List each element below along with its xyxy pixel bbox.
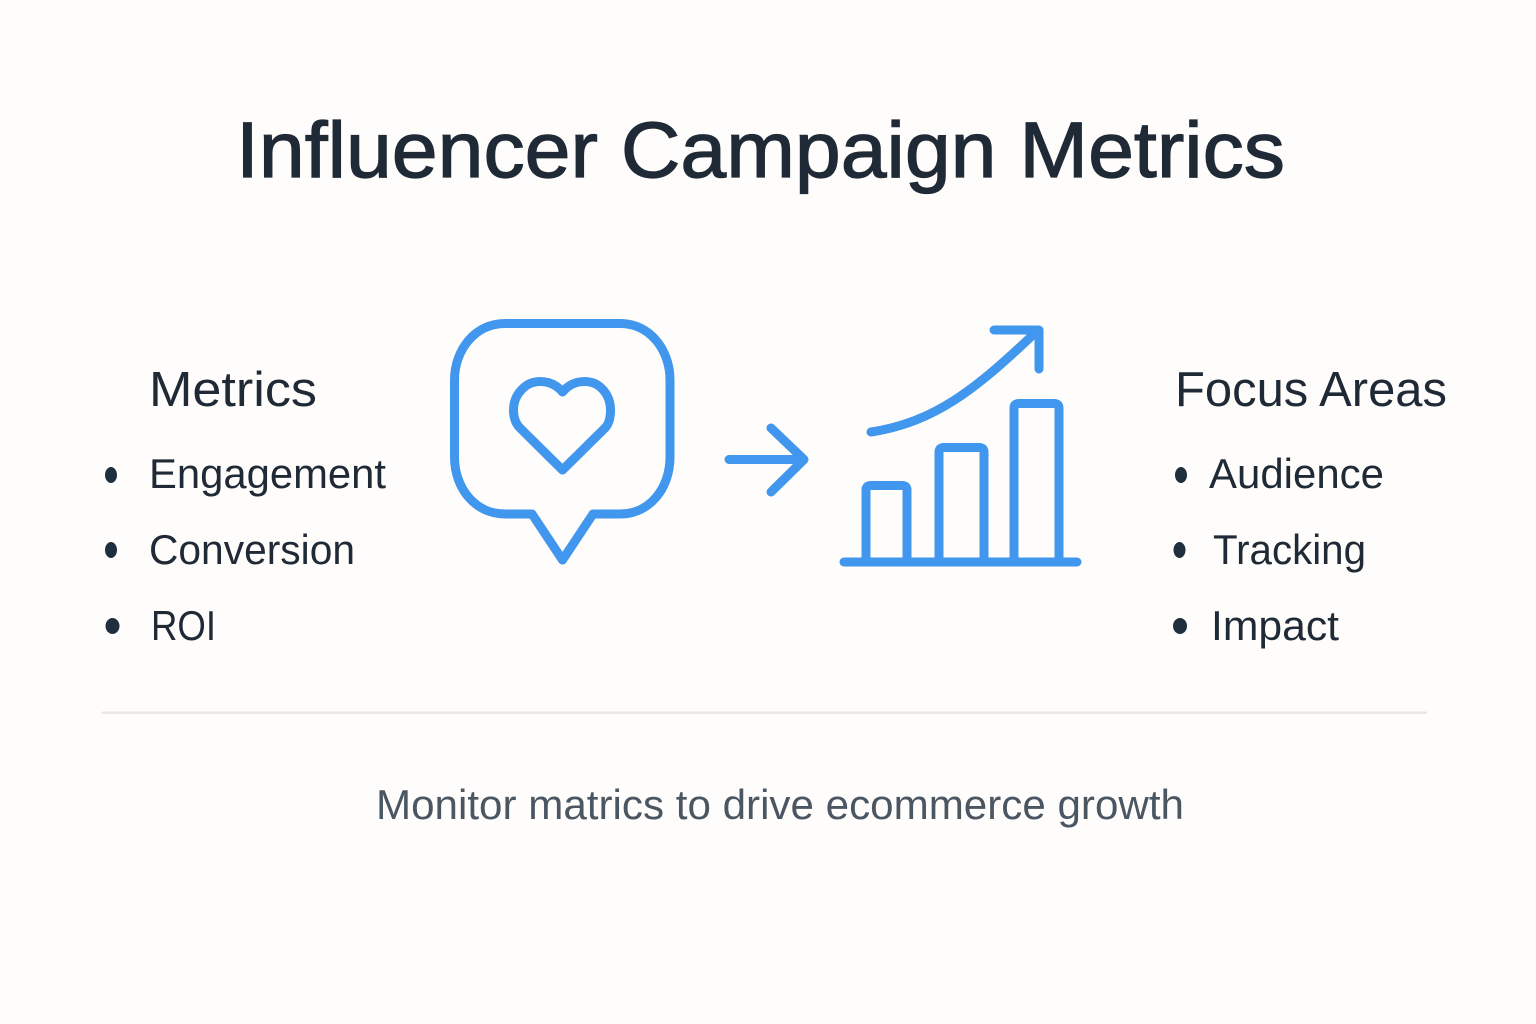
icon: growth bar chart [844, 330, 1077, 562]
title: Influencer Campaign Metrics [236, 105, 1285, 194]
list item: roi [106, 602, 216, 649]
list item: impact: Impact [1211, 602, 1339, 649]
list item: engagement: Engagement [149, 450, 386, 497]
heading: focus areas: Focus Areas [1175, 363, 1447, 417]
panel: focus areas [1173, 363, 1447, 649]
tagline: Monitor matrics to drive ecommerce growth [376, 781, 1184, 828]
list item: audience: Audience [1209, 450, 1384, 497]
list item: roi: ROI [151, 602, 216, 649]
icon: speech bubble with heart [454, 324, 670, 560]
arrow [729, 428, 804, 492]
list item: tracking: Tracking [1213, 526, 1366, 573]
panel: metrics [105, 363, 386, 649]
heading: metrics: Metrics [149, 363, 317, 417]
list item: conversion: Conversion [149, 526, 355, 573]
